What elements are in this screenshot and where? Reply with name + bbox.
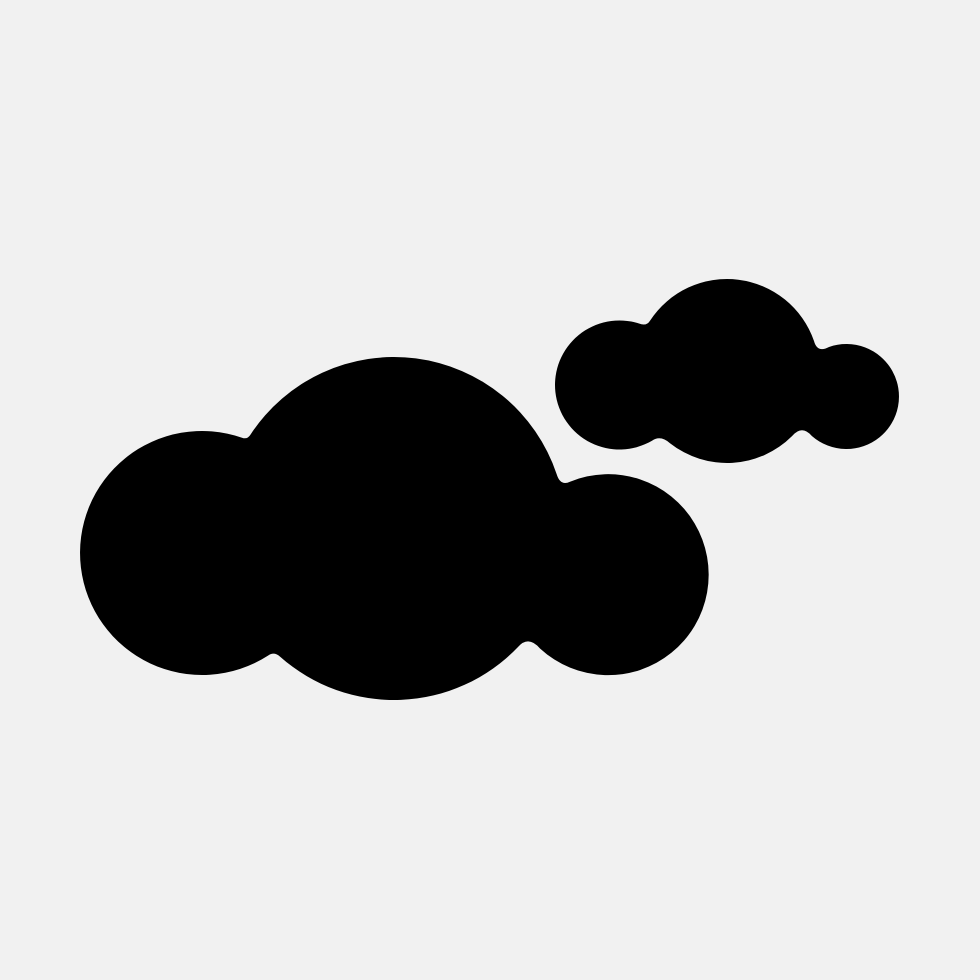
- icon: large cloud: [80, 357, 709, 700]
- icon: small cloud: [555, 279, 899, 463]
